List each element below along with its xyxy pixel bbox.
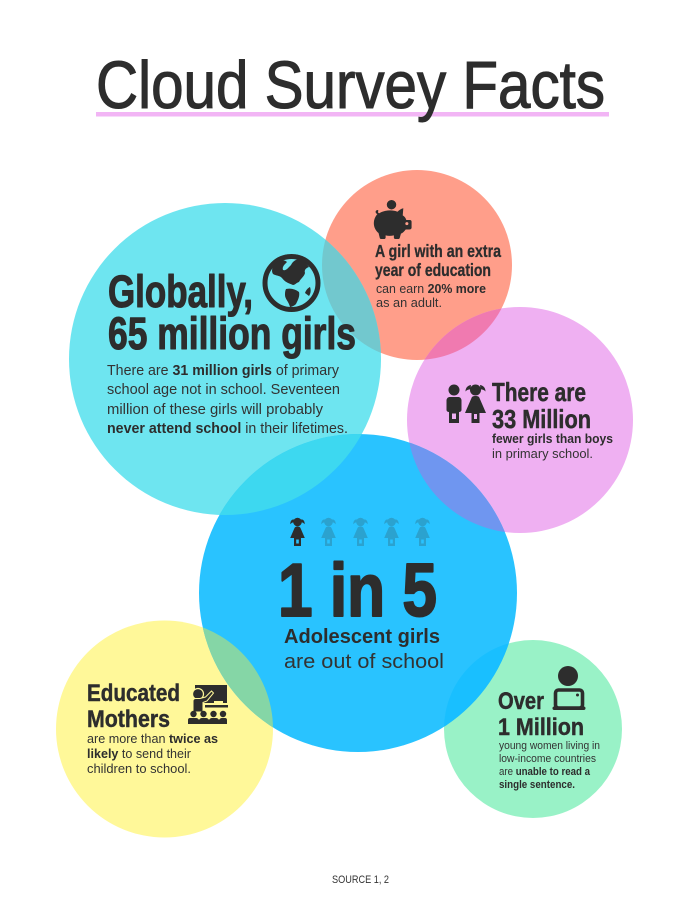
- body text: are out of school: [284, 650, 444, 673]
- infographic: [56, 59, 633, 884]
- panel: yellow circle: [56, 620, 273, 838]
- icon: boy and girl: [446, 384, 486, 423]
- text block: 33 million: 33 Million: [492, 404, 591, 434]
- text block: extra year of education: as an adult.: [376, 295, 442, 310]
- title: Cloud Survey Facts: [96, 48, 605, 123]
- text block: extra year of education: year of education: [375, 260, 491, 280]
- big stat: 1 in 5: [278, 548, 437, 632]
- text block: educated mothers: [87, 680, 228, 776]
- panel: cyan circle: [69, 203, 381, 515]
- text block: 33 million: in primary school.: [492, 446, 593, 461]
- title underline: [96, 112, 609, 116]
- icon row: girls: [290, 518, 430, 546]
- heading: Educated: [87, 680, 180, 707]
- icon: piggy bank: [374, 200, 412, 239]
- body text: million of these girls will probably: [107, 401, 323, 418]
- heading: Over: [498, 688, 544, 715]
- body text: school age not in school. Seventeen: [107, 381, 340, 398]
- body text: are more than twice as: [87, 732, 218, 746]
- body text: fewer girls than boys: [492, 431, 613, 446]
- body text: There are 31 million girls of primary: [107, 362, 339, 379]
- heading: A girl with an extra: [375, 241, 501, 261]
- panel: green circle: [444, 640, 622, 818]
- source note: SOURCE 1, 2: [332, 874, 389, 886]
- text block: over 1 million: 1 Million: [498, 714, 584, 741]
- text block: 33 million: [446, 377, 613, 461]
- text block: over 1 million: are unable to read a: [499, 766, 591, 778]
- icon: globe: [265, 256, 318, 310]
- text block: extra year of education: [374, 200, 501, 310]
- panel: blue circle: [199, 434, 517, 752]
- panel: pink circle: [407, 307, 633, 533]
- text block: 1 in 5: [278, 518, 444, 673]
- text block: globally: [107, 256, 356, 437]
- text block: over 1 million: [498, 666, 600, 791]
- text block: educated mothers: Mothers: [87, 706, 170, 733]
- text block: educated mothers: likely to send their: [87, 747, 191, 761]
- body text: never attend school in their lifetimes.: [107, 420, 348, 437]
- icon: person with laptop: [552, 666, 586, 710]
- heading: There are: [492, 377, 586, 407]
- icon: teacher and class: [188, 685, 228, 724]
- heading: globally: Globally,: [108, 266, 253, 317]
- heading: Adolescent girls: [284, 626, 440, 648]
- circle overlaps: [202, 210, 509, 728]
- body text: [107, 362, 348, 437]
- text block: over 1 million: low-income countries: [499, 753, 596, 765]
- text block: educated mothers: children to school.: [87, 762, 191, 776]
- panel: salmon circle: [322, 170, 512, 360]
- body text: can earn 20% more: [376, 281, 486, 296]
- heading: 65 million girls: 65 million girls: [108, 308, 356, 359]
- body text: young women living in: [499, 740, 600, 752]
- text block: over 1 million: single sentence.: [499, 779, 575, 791]
